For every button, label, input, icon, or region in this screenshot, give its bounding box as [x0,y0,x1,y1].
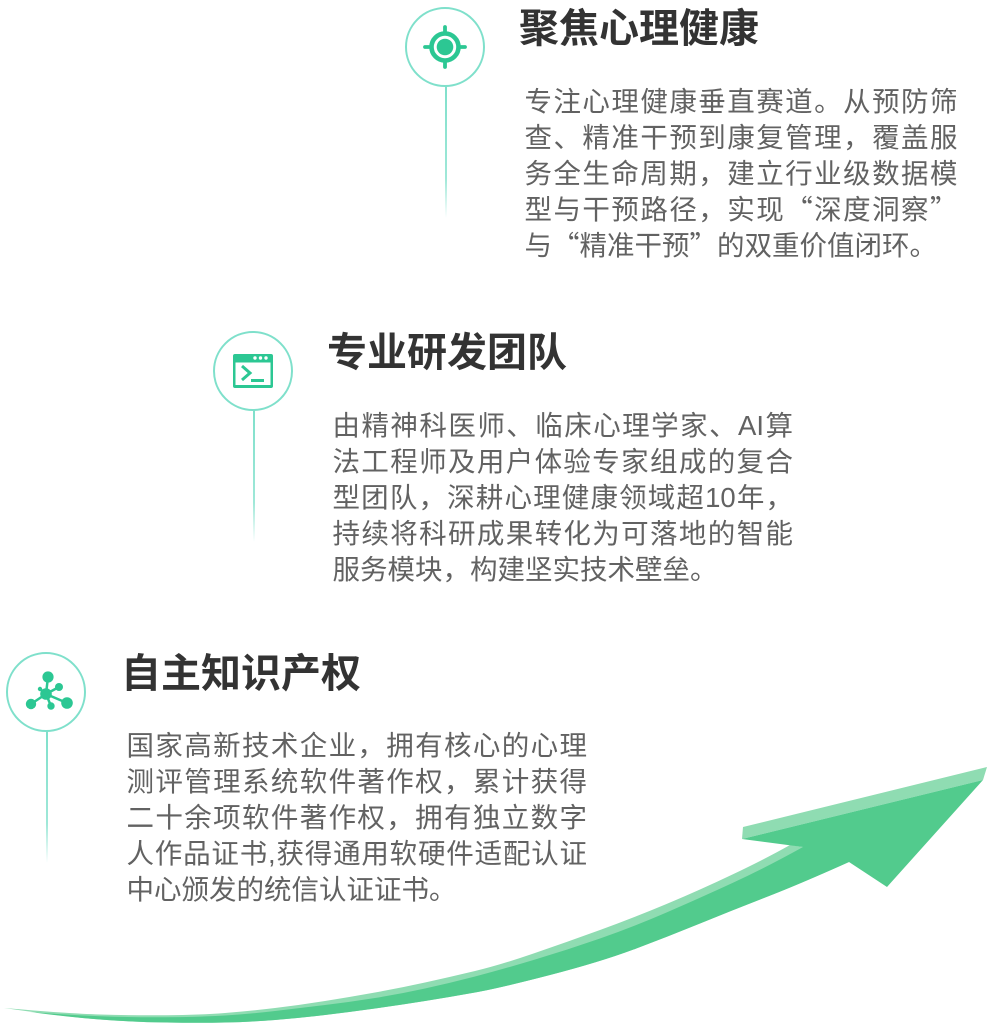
text block [332,410,793,585]
text block: 由精神科医师、临床心理学家、AI算 [332,410,793,441]
text block: 中心颁发的统信认证证书。 [126,874,456,905]
text block: 二十余项软件著作权，拥有独立数字 [126,802,587,833]
heading: 自主知识产权 [121,652,361,696]
text block: 服务模块，构建坚实技术壁垒。 [332,554,718,585]
item: 专业研发团队 [213,331,793,585]
text block: 专注心理健康垂直赛道。从预防筛 [524,86,958,117]
text block [524,86,958,263]
heading: 聚焦心理健康 [519,7,759,51]
item: 自主知识产权 [6,652,587,905]
heading: 专业研发团队 [327,331,567,375]
text block: 持续将科研成果转化为可落地的智能 [332,518,793,549]
text block: 查、精准干预到康复管理，覆盖服 [524,122,958,153]
item: 聚焦心理健康 [405,7,958,263]
text block: 法工程师及用户体验专家组成的复合 [332,446,793,477]
text block: 测评管理系统软件著作权，累计获得 [126,766,587,797]
text block: 国家高新技术企业，拥有核心的心理 [126,730,587,761]
text block: 务全生命周期，建立行业级数据模 [524,158,958,189]
text block: 型团队，深耕心理健康领域超10年， [332,482,793,513]
text block: 型与干预路径，实现“深度洞察” [524,187,958,227]
text block: 人作品证书,获得通用软硬件适配认证 [126,838,587,869]
text block: 与“精准干预”的双重价值闭环。 [524,223,937,263]
text block [126,730,587,905]
